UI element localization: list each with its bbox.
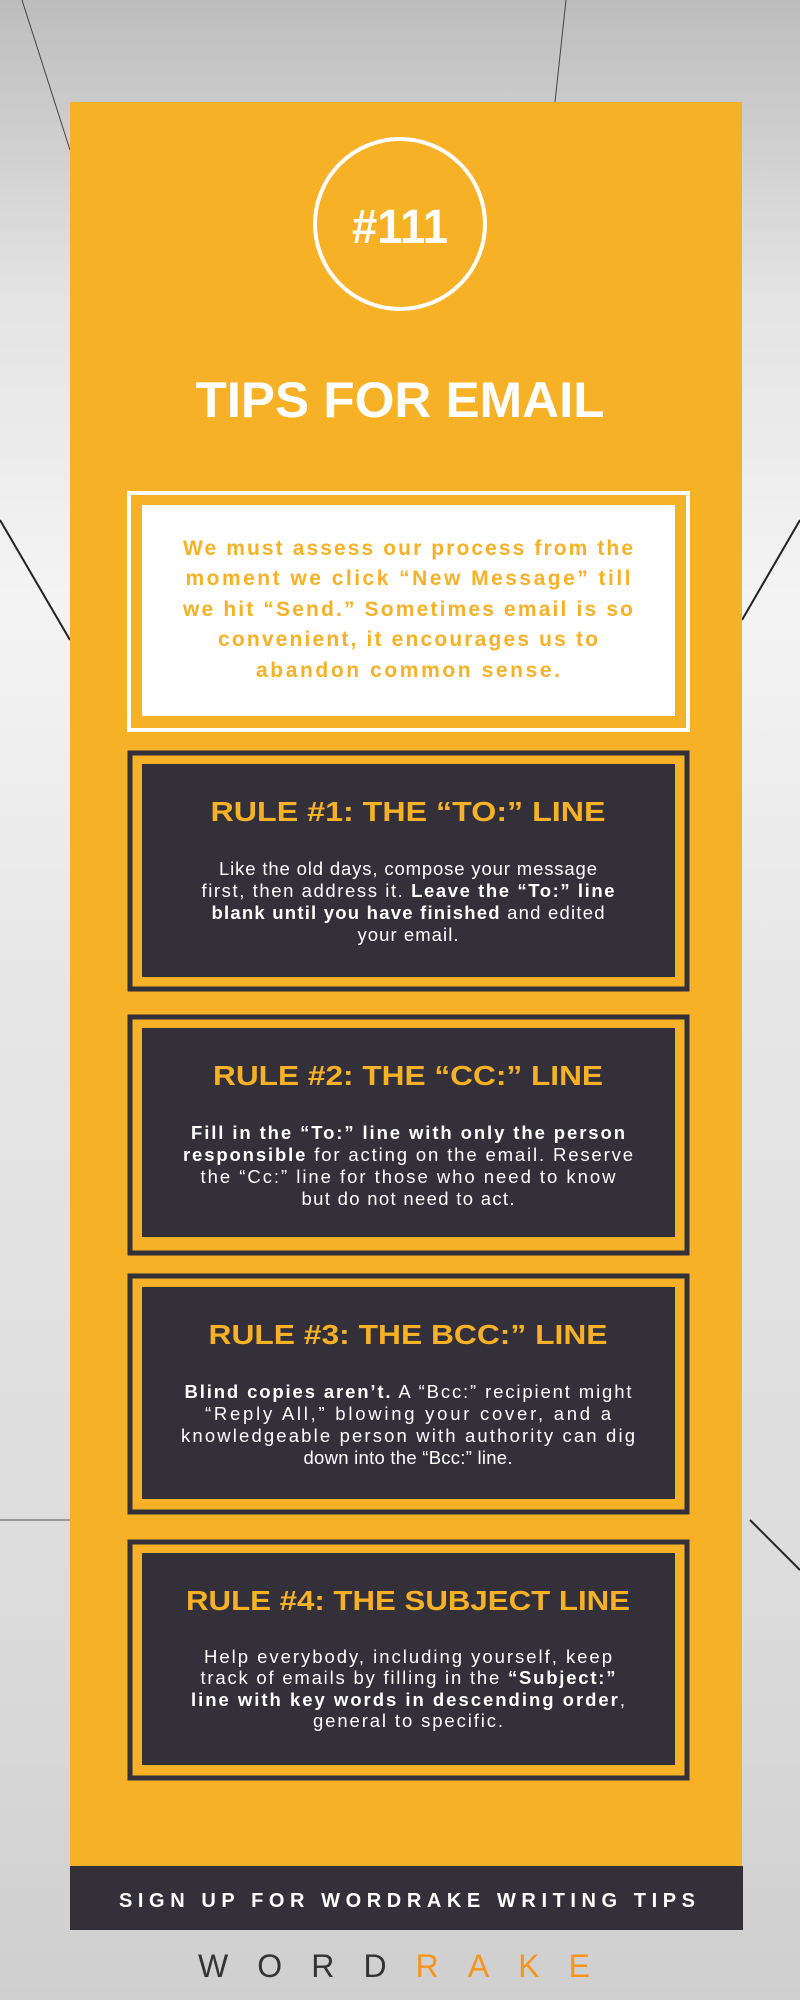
body: rule 2: Fill in the “To:” line with only the person: [191, 1122, 625, 1143]
body: rule 1: your email.: [358, 924, 458, 945]
panel: intro: [129, 493, 688, 730]
body: rule 3: down into the “Bcc:” line.: [304, 1447, 512, 1468]
body: rule 1: blank until you have finished and edited: [212, 902, 604, 923]
panel: yellow background: [70, 102, 742, 1868]
heading: rule 2: RULE #2: THE “CC:” LINE: [213, 1060, 603, 1091]
body: rule 4: Help everybody, including yourself, keep: [204, 1646, 612, 1667]
intro text: We must assess our process from the: [183, 537, 633, 560]
body: rule 3: [181, 1381, 635, 1468]
body: rule 1: Like the old days, compose your message: [219, 858, 597, 879]
panel: rule 1: [130, 753, 687, 989]
heading: rule 4: RULE #4: THE SUBJECT LINE: [186, 1585, 630, 1616]
intro text: we hit “Send.” Sometimes email is so: [182, 598, 633, 621]
body: rule 4: line with key words in descending order,: [191, 1689, 625, 1710]
body: rule 2: [183, 1122, 633, 1209]
body: rule 3: Blind copies aren’t. A “Bcc:” recipient might: [184, 1381, 632, 1402]
intro text: convenient, it encourages us to: [218, 628, 598, 651]
body: rule 1: [202, 858, 614, 945]
intro text: moment we click “New Message” till: [186, 567, 630, 590]
badge: #111 circle: [315, 139, 485, 309]
heading: rule 1: RULE #1: THE “TO:” LINE: [210, 796, 606, 827]
footer bar: sign up: SIGN UP FOR WORDRAKE WRITING TIPS: [119, 1890, 695, 1912]
body: rule 2: but do not need to act.: [302, 1188, 514, 1209]
logo: WordRake: WORD RAKE: [198, 1948, 590, 1984]
body: rule 4: [191, 1646, 625, 1731]
intro text: [182, 537, 633, 682]
panel: rule 4: [130, 1542, 687, 1778]
body: rule 2: the “Cc:” line for those who need to know: [200, 1166, 616, 1187]
title: TIPS FOR EMAIL: [196, 372, 604, 428]
panel: rule 3: [130, 1276, 687, 1512]
badge: #111 circle: #111: [352, 201, 448, 254]
body: rule 2: responsible for acting on the email. Reserve: [183, 1144, 633, 1165]
body: rule 1: first, then address it. Leave the “To:” line: [202, 880, 614, 901]
body: rule 3: “Reply All,” blowing your cover, and a: [205, 1403, 612, 1424]
body: rule 4: track of emails by filling in the “Subject:”: [200, 1667, 616, 1688]
heading: rule 3: RULE #3: THE BCC:” LINE: [208, 1319, 608, 1350]
panel: rule 2: [130, 1017, 687, 1253]
body: rule 4: general to specific.: [313, 1710, 503, 1731]
footer bar: sign up: [70, 1866, 743, 1930]
intro text: abandon common sense.: [256, 659, 560, 682]
body: rule 3: knowledgeable person with authority can dig: [181, 1425, 635, 1446]
